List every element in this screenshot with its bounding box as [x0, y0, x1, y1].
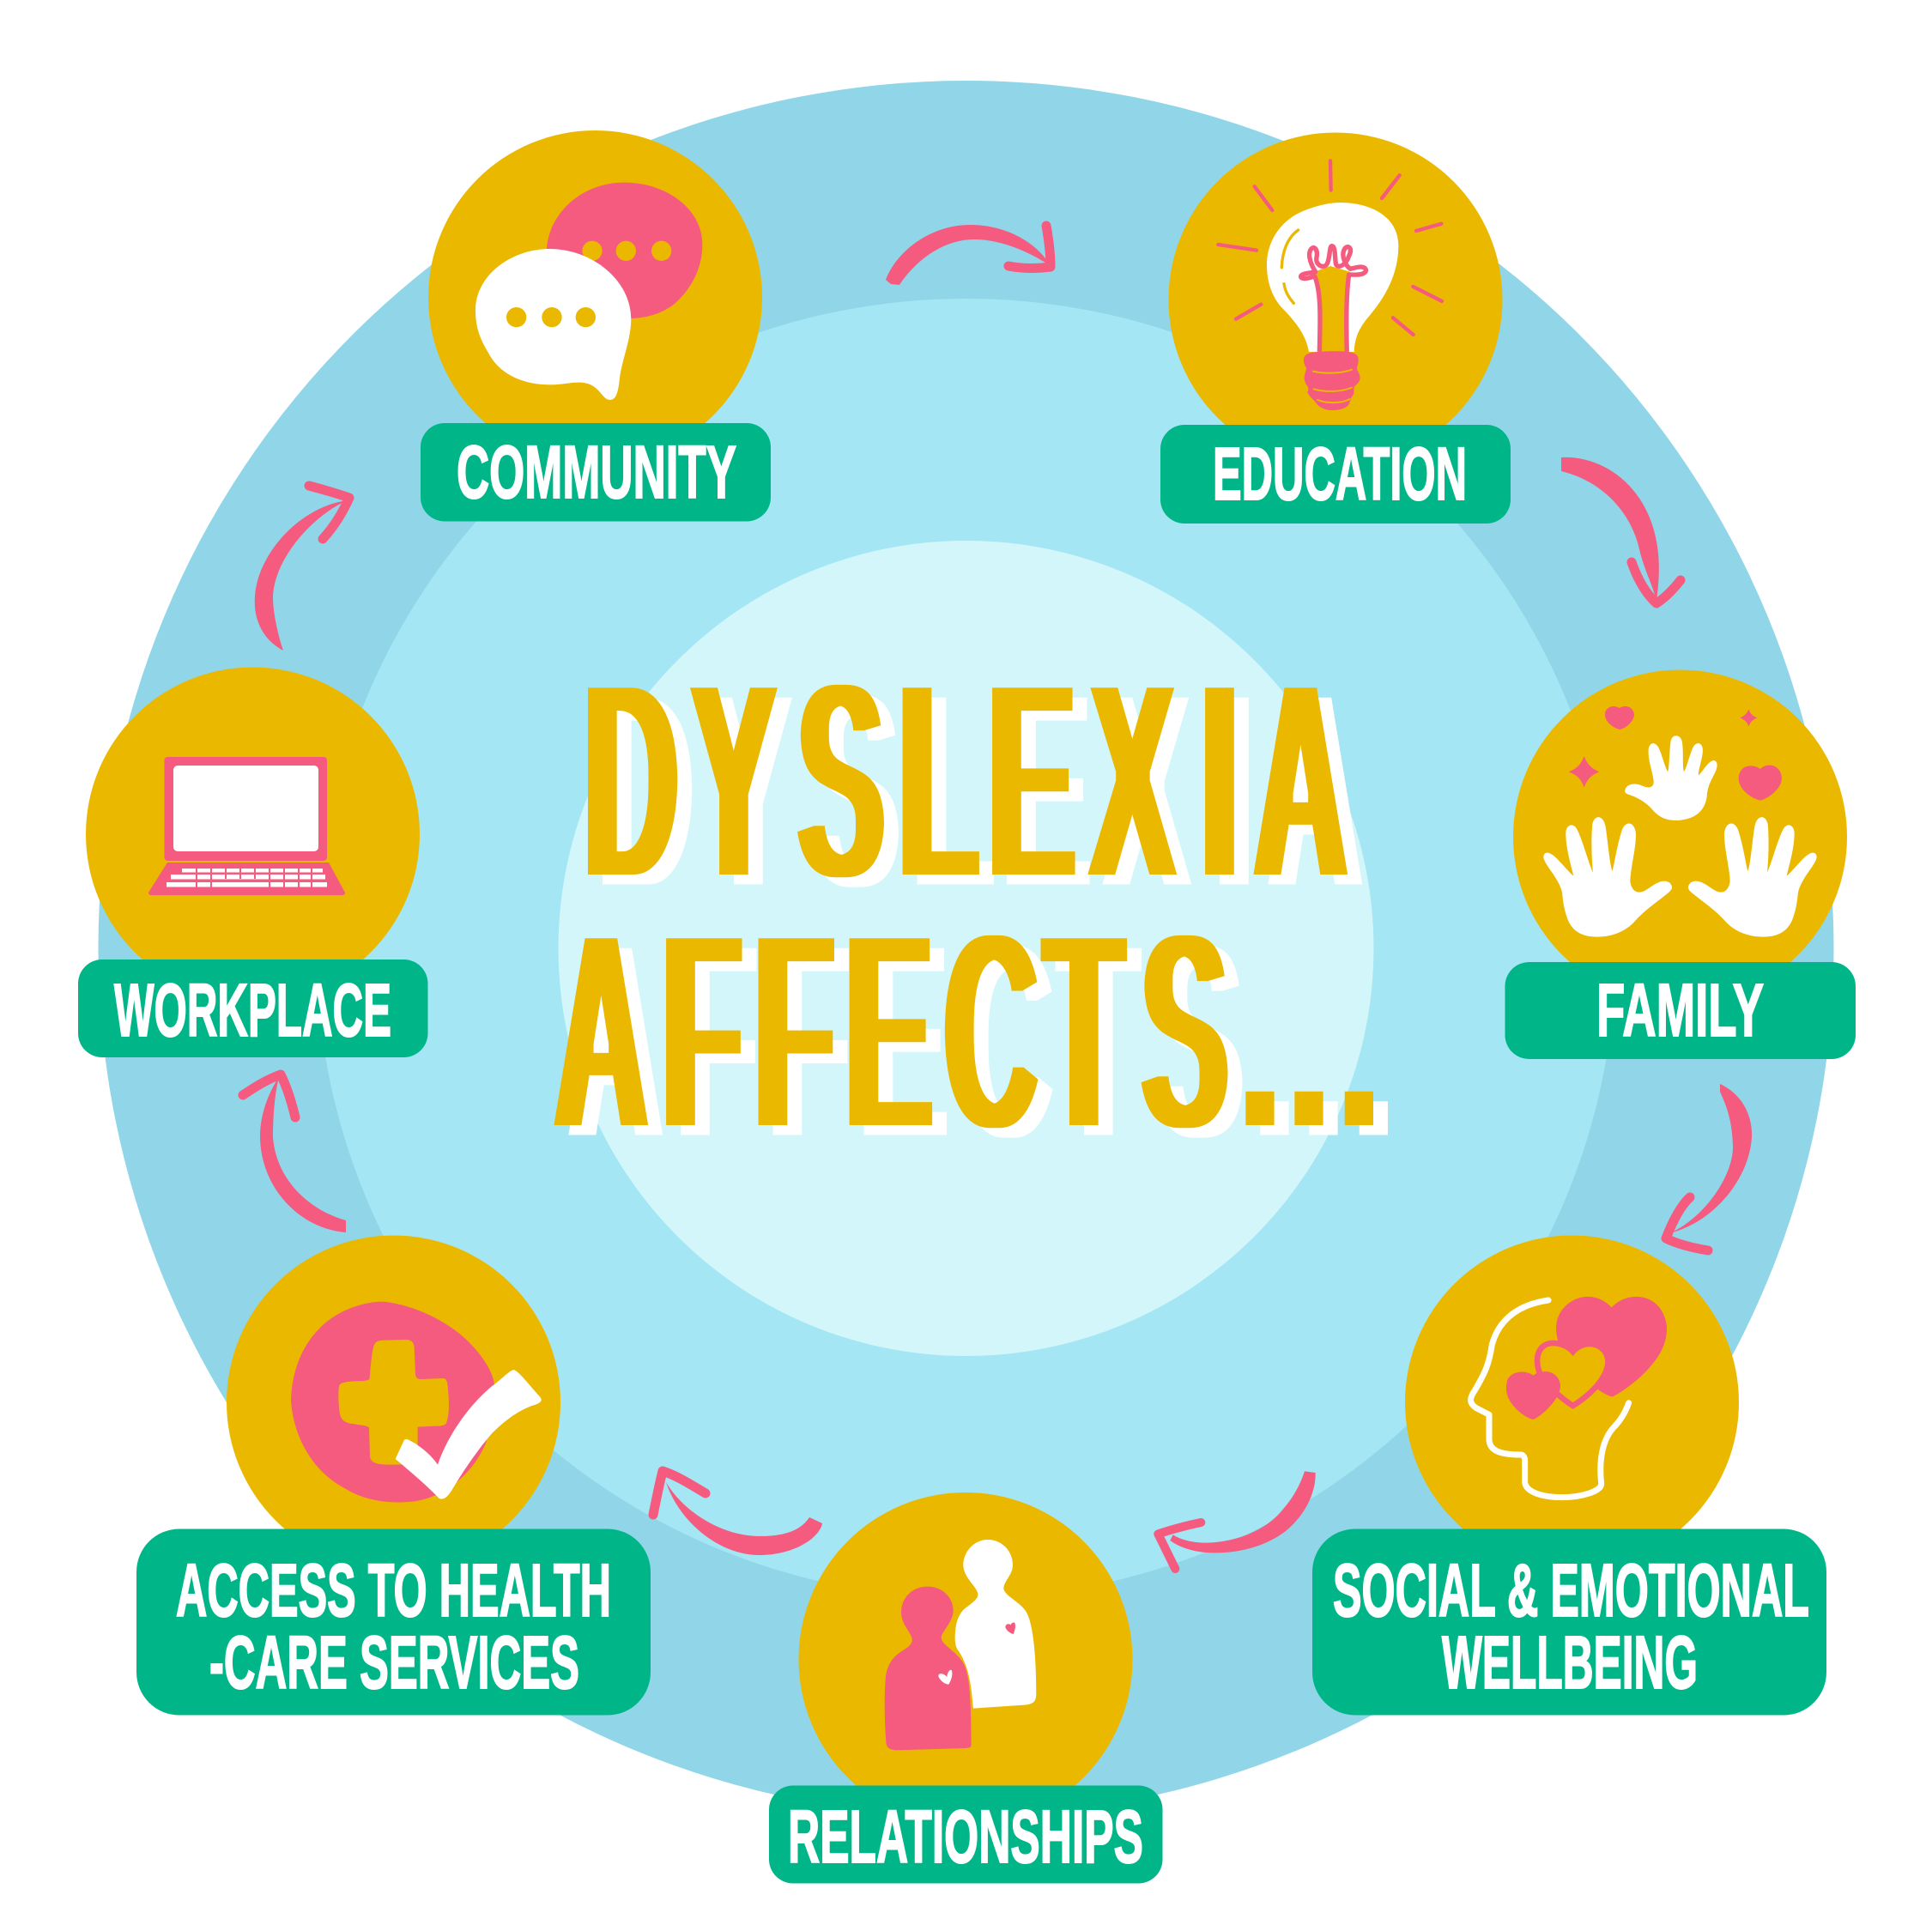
- title: dyslexia affects: [554, 622, 1391, 1200]
- panel: community: [421, 130, 771, 522]
- icon: head with hearts: [1471, 1297, 1667, 1498]
- arrow: relationships to access to health-care: [653, 1471, 822, 1555]
- label: family: FAMILY: [1596, 969, 1764, 1052]
- title text: DYSLEXIA: [584, 622, 1348, 940]
- label: relationships: RELATIONSHIPS: [788, 1795, 1143, 1879]
- icon: light bulb: [1218, 160, 1442, 410]
- label: social and emotional wellbeing: [1312, 1529, 1826, 1715]
- panel: social and emotional wellbeing: [1312, 1236, 1826, 1715]
- label: access to health-care services: ACCESS TO HEALTH: [176, 1549, 611, 1632]
- title shadow: AFFECTS...: [569, 883, 1391, 1200]
- label: family: [1505, 962, 1856, 1059]
- label: education: [1160, 425, 1511, 524]
- panel: family: [1505, 669, 1856, 1059]
- arrow: social and emotional wellbeing to relationships: [1158, 1471, 1316, 1569]
- label: community: [421, 423, 771, 522]
- icon: laptop: [148, 757, 345, 895]
- label: education: EDUCATION: [1213, 433, 1467, 516]
- arrow: access to health-care to workplace: [243, 1074, 346, 1232]
- panel: workplace: [78, 668, 427, 1057]
- label: workplace: [78, 959, 427, 1057]
- title text: AFFECTS...: [554, 873, 1377, 1190]
- arrow: family to social and emotional wellbeing: [1666, 1084, 1752, 1250]
- panel: relationships: [769, 1492, 1162, 1883]
- label: access to health-care services: -CARE SERVICES: [209, 1621, 579, 1704]
- icon: two people: [885, 1540, 1036, 1750]
- title shadow: DYSLEXIA: [599, 633, 1362, 949]
- panel: education: [1160, 132, 1511, 524]
- arrow: workplace to community: [255, 486, 349, 651]
- arrow: education to family: [1561, 457, 1681, 603]
- icon: speech bubbles: [475, 183, 702, 400]
- label: access to health-care services: [136, 1529, 651, 1715]
- title text: [554, 622, 1377, 1190]
- panel: access to health-care services: [136, 1236, 651, 1715]
- label: relationships: [769, 1785, 1162, 1883]
- arrow: community to education: [886, 225, 1051, 285]
- label: social and emotional wellbeing: WELLBEING: [1442, 1621, 1698, 1704]
- label: workplace: WORKPLACE: [114, 969, 391, 1052]
- label: community: COMMUNITY: [457, 431, 736, 514]
- title shadow: [569, 633, 1391, 1200]
- icon: hands and hearts: [1543, 706, 1817, 937]
- icon: medical cross with check: [291, 1302, 542, 1502]
